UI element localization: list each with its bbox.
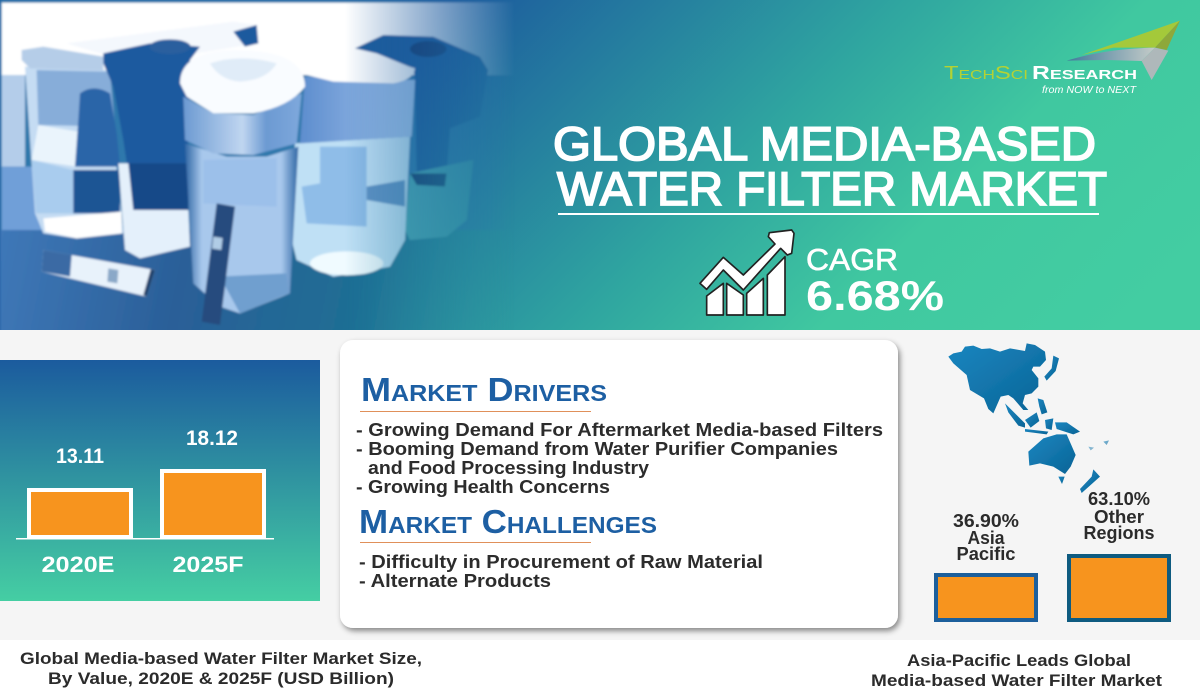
heading: market challenges: Market Challenges [359,503,657,540]
caption: Asia-Pacific: Media-based Water Filter Market [871,671,1162,690]
title: GLOBAL MEDIA-BASED [553,117,1096,170]
bar: other regions share: Regions [1084,523,1154,543]
challenges list: - Difficulty in Procurement of Raw Material [359,551,763,572]
CAGR callout: CAGR [806,242,898,277]
bar 2025F: 18.12 [186,427,238,450]
caption: Asia-Pacific: Asia-Pacific Leads Global [907,651,1131,670]
bar: other regions share: Other [1094,507,1144,527]
caption: market size [20,649,422,688]
logo: TechSci Research: Research [1032,63,1137,83]
drivers list: - Growing Health Concerns [356,476,610,497]
bar: other regions share: 63.10% [1088,489,1150,509]
pitcher 5 [355,35,488,173]
bar 2020E [29,445,131,577]
pitcher 4 [292,137,410,277]
drivers list: - Growing Demand For Aftermarket Media-based Filters [356,419,883,440]
title [553,117,1107,215]
photo: water filter pitchers [0,0,522,335]
title: WATER FILTER MARKET [557,162,1107,215]
CAGR callout [806,242,944,319]
logo tagline: from NOW to NEXT [1042,84,1138,96]
icon: growth chart with arrow [700,230,794,315]
challenges list [359,551,763,591]
drivers list: and Food Processing Industry [368,457,650,478]
bar: Asia Pacific share: Pacific [956,544,1016,564]
bar: Asia Pacific share: 36.90% [953,511,1019,531]
bar 2025F [162,427,264,577]
pitcher 2 [73,22,251,53]
caption: Asia-Pacific [871,651,1162,690]
drivers list [356,419,883,497]
panel: market drivers and challenges [340,340,898,628]
CAGR callout: 6.68% [806,272,944,319]
logo: TechSci Research [944,21,1180,96]
caption: market size: By Value, 2020E & 2025F (USD Billion) [48,669,394,688]
bar 2020E: 2020E [42,552,114,577]
caption: market size: Global Media-based Water Filter Market Size, [20,649,422,668]
pitcher 1 [25,67,123,238]
logo wordmark: TechSci [944,63,1028,83]
page background [0,330,1200,640]
map: Asia Pacific [948,343,1109,493]
bar: other regions share [1069,489,1169,620]
hero banner [0,0,1200,335]
panel: market size bar chart [0,360,320,601]
heading: market drivers: Market Drivers [361,371,607,408]
logo wing [1067,21,1180,80]
bar 2025F: 2025F [172,552,244,577]
bar 2020E: 13.11 [56,445,104,468]
pitcher 3 [185,143,298,313]
bar: Asia Pacific share: Asia [968,528,1005,548]
tester [42,250,155,297]
bar: Asia Pacific share [936,511,1036,620]
drivers list: - Booming Demand from Water Purifier Companies [356,438,838,459]
challenges list: - Alternate Products [359,570,551,591]
pen [202,203,235,325]
